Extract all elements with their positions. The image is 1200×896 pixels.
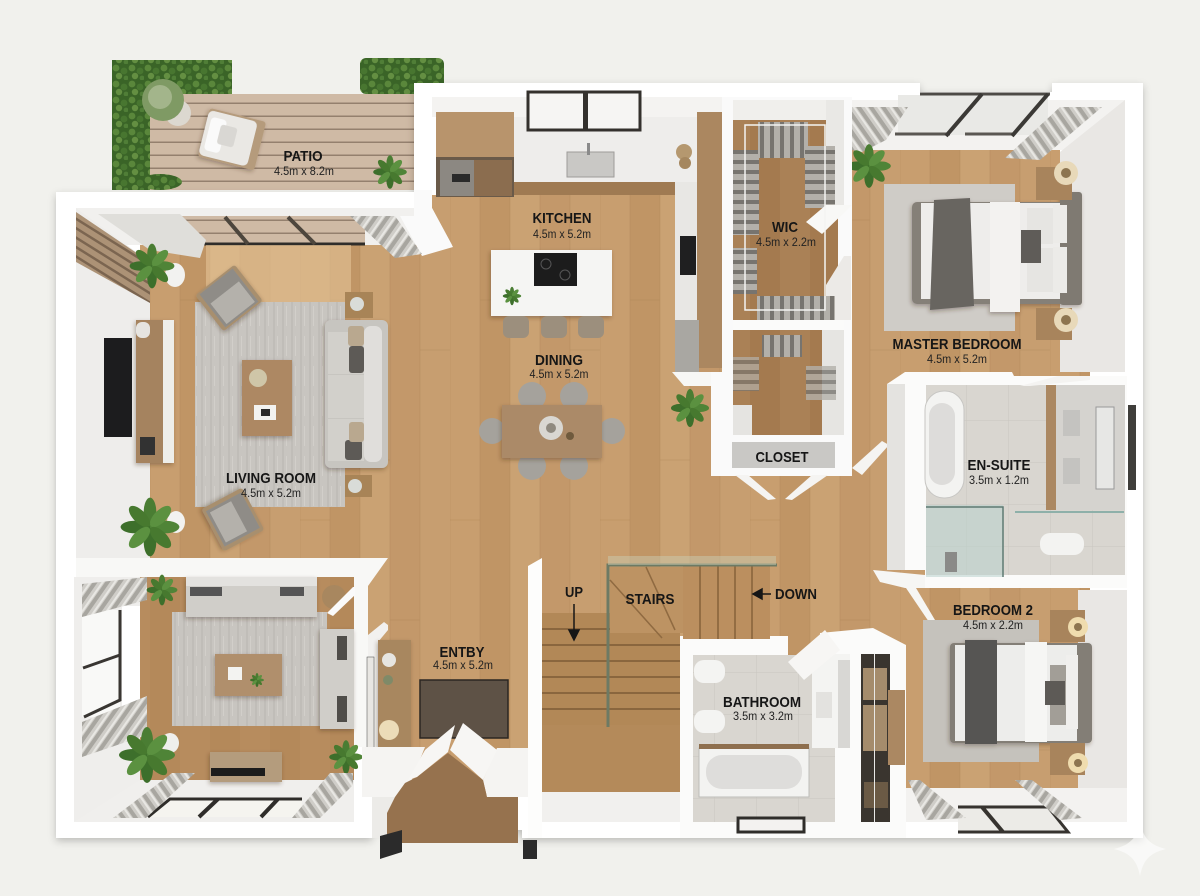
ensuite bottom ledge: [873, 570, 925, 588]
master rug: [884, 184, 1015, 331]
panel: master bedroom: [847, 94, 1125, 372]
arrow: down: [753, 589, 771, 599]
lounge curtain lower: [82, 696, 147, 757]
patio hedge: [112, 60, 232, 190]
bathroom floor: [693, 655, 835, 822]
label: stairs: STAIRS: [626, 591, 674, 608]
nightstand top: [1036, 161, 1078, 200]
ensuite door: [1020, 376, 1090, 386]
armchair top: [195, 264, 263, 332]
icon: sparkle watermark: [1114, 822, 1166, 876]
bathroom door: [788, 630, 840, 680]
bar stools: [503, 316, 604, 338]
kitchen counter: [514, 117, 698, 182]
label: entby: 4.5m x 5.2m: [433, 658, 493, 672]
panel: main wood floor: [140, 195, 1090, 795]
kitchen window: [528, 92, 640, 130]
bedroom2 curtain right: [1015, 780, 1082, 820]
winder steps: [610, 567, 683, 633]
label: bathroom: [723, 694, 801, 723]
armchair bottom: [201, 488, 264, 552]
lounge curtain bottom left: [113, 773, 195, 818]
label: en-suite: [968, 457, 1030, 487]
clothes right: [805, 146, 835, 208]
master window: [895, 94, 1050, 136]
label: bedroom 2: BEDROOM 2: [953, 602, 1033, 619]
porch post left: [380, 830, 402, 859]
entry wall left: [362, 747, 425, 797]
closet floor: [733, 330, 839, 435]
label: bathroom: BATHROOM: [723, 694, 801, 711]
patio lounge chair: [198, 108, 266, 171]
label: patio: 4.5m x 8.2m: [274, 164, 334, 178]
closet clothes left: [733, 357, 759, 391]
panel: kitchen: [432, 92, 728, 386]
island plant: [503, 287, 521, 305]
WIC stub wall: [826, 256, 851, 320]
slatted wall panel: [76, 212, 150, 303]
bedroom2 nightstand top: [1050, 610, 1088, 642]
lounge large plant: [119, 727, 179, 783]
WIC right face: [826, 100, 844, 225]
stair well base: [542, 792, 680, 822]
glass rail: [608, 565, 777, 727]
sofa: [325, 320, 388, 468]
dining table: [502, 405, 602, 458]
living window: [165, 216, 365, 245]
lounge left face: [74, 577, 140, 822]
panel: entry: [362, 640, 537, 859]
wardrobe wood panel: [888, 690, 905, 765]
label: master bedroom: [892, 336, 1022, 366]
WIC floor: [733, 120, 838, 320]
closet clothes top: [762, 335, 802, 357]
lounge window bottom: [148, 798, 302, 817]
living curtain left: [98, 214, 206, 258]
WIC rail: [745, 125, 825, 310]
arrow: up: [569, 604, 579, 640]
label: master bedroom: 4.5m x 5.2m: [927, 352, 987, 366]
living curtain right: [350, 216, 422, 258]
panel: dining set: [479, 382, 625, 480]
media console: [136, 320, 174, 463]
kitchen white top: [432, 97, 728, 117]
clothes left lower: [733, 248, 757, 294]
label: bedroom 2: [953, 602, 1033, 632]
bathroom block walls: [680, 628, 906, 838]
master bed: [912, 192, 1082, 312]
living rug: [195, 302, 345, 507]
panel: stairs: [528, 556, 777, 838]
kitchen upper cabinet: [436, 112, 514, 157]
side table bottom: [345, 475, 372, 497]
ensuite tile floor: [926, 385, 1125, 575]
plant: corridor: [671, 389, 709, 427]
bathroom window: [736, 817, 806, 833]
counter ornaments: [676, 144, 692, 169]
label: entby: ENTBY: [440, 644, 484, 661]
WIC divider: [733, 320, 844, 330]
light patch: [206, 245, 351, 315]
bedroom2 bed: [950, 640, 1092, 744]
wall corner kitchen side: [400, 190, 453, 256]
bedroom2 right face: [1078, 590, 1127, 822]
door mat: [420, 680, 508, 738]
lounge tv unit: [210, 752, 282, 782]
label: bedroom 2: 4.5m x 2.2m: [963, 618, 1023, 632]
label: patio: [274, 148, 334, 178]
bedroom2 door: [906, 588, 935, 622]
porch side: [372, 797, 395, 838]
closet band: [732, 442, 835, 468]
grey appliance: [675, 320, 699, 372]
label: patio: PATIO: [284, 148, 323, 165]
label: kitchen: KITCHEN: [532, 210, 592, 227]
dining chairs: [479, 382, 625, 480]
master right wall face: [1060, 100, 1125, 372]
bathroom vanity: [812, 654, 850, 748]
label: WIC: [756, 219, 816, 249]
label: bathroom: 3.5m x 3.2m: [733, 709, 793, 723]
plant: living large: [121, 498, 185, 556]
lounge corner wall: [354, 747, 372, 838]
bedroom2 nightstand bottom: [1050, 743, 1088, 775]
tub: [925, 391, 964, 498]
toilet lower: [694, 710, 725, 733]
label: closet: CLOSET: [756, 449, 808, 466]
shower glass: [926, 505, 1124, 577]
lounge curtain top: [82, 577, 147, 617]
label: en-suite: EN-SUITE: [968, 457, 1030, 474]
bathtub: [699, 744, 809, 797]
label: master bedroom: MASTER BEDROOM: [892, 336, 1022, 353]
panel: bedroom 2: [905, 590, 1127, 832]
label: dining: DINING: [535, 352, 583, 369]
bedroom2 rug: [923, 620, 1039, 762]
ensuite walls: [887, 372, 1127, 588]
lounge sofa right: [320, 629, 354, 729]
entry console: [378, 640, 411, 748]
lounge walls: [76, 558, 388, 747]
lounge door: [327, 587, 355, 616]
WIC door: [806, 205, 852, 234]
label: up: UP: [565, 584, 583, 601]
label: living room: LIVING ROOM: [226, 470, 316, 487]
closet shelf: [733, 405, 752, 435]
label: living room: 4.5m x 5.2m: [241, 486, 301, 500]
kitchen stub wall: [672, 372, 722, 386]
entry door right: [450, 723, 497, 780]
room labels: [226, 148, 1033, 723]
lounge rug: [172, 612, 327, 726]
label: en-suite: 3.5m x 1.2m: [969, 473, 1029, 487]
nightstand bottom: [1036, 308, 1078, 340]
bedroom2 window: [958, 805, 1068, 832]
upper flight: [683, 565, 770, 639]
panel: bathroom and wardrobe: [680, 628, 906, 838]
label: WIC: WIC: [772, 219, 798, 236]
label: kitchen: 4.5m x 5.2m: [533, 227, 591, 241]
label: living room: [226, 470, 316, 500]
landing: [542, 725, 680, 792]
winder lines: [610, 567, 675, 638]
plant: living corner: [130, 244, 185, 288]
lounge small plant: [329, 740, 363, 774]
clothes top: [758, 122, 808, 158]
bedroom2 bottom ledge: [905, 788, 1127, 822]
label: dining: 4.5m x 5.2m: [530, 367, 588, 381]
panel: WIC and closet: [711, 97, 889, 500]
lounge curtain bottom right: [292, 773, 353, 818]
closet clothes right: [806, 366, 836, 400]
patio hedge right: [360, 58, 444, 94]
TV: [104, 338, 132, 437]
patio potted shrub: [142, 79, 191, 126]
right counter: [675, 182, 698, 322]
lounge bottom ledge: [74, 780, 354, 822]
master upper floor: [851, 150, 1060, 196]
lower flight: [542, 613, 680, 725]
panel: en-suite: [873, 372, 1136, 622]
vanity: [1046, 385, 1125, 510]
glass pane: [608, 556, 776, 565]
wall oven: [680, 236, 696, 275]
lounge floor: [140, 577, 354, 780]
side table top: [345, 292, 373, 318]
clothes left: [733, 150, 759, 235]
label: entby: [433, 644, 493, 672]
fridge: [436, 157, 514, 197]
building walls: [56, 83, 1143, 838]
lounge wall stub: [368, 622, 388, 747]
panel: bottom-left lounge: [74, 558, 388, 838]
toilet upper: [694, 660, 725, 683]
panel: living room: [76, 190, 453, 558]
tall wood cabinet: [697, 112, 722, 368]
stair left wall: [528, 558, 542, 838]
closet doors: [735, 441, 889, 500]
porch floor: [387, 753, 518, 843]
porch post right: [523, 840, 537, 859]
master curtain left: [852, 107, 908, 152]
clothes bottom: [757, 296, 835, 320]
master window sill: [851, 100, 1125, 150]
wardrobe: [861, 654, 890, 822]
label: down: DOWN: [775, 586, 817, 603]
master plant: [847, 144, 891, 188]
kitchen counter front: [514, 182, 676, 195]
closet right face: [822, 330, 844, 435]
WIC back ledge: [733, 100, 838, 122]
closet block walls: [711, 97, 852, 476]
living top ledge: [76, 208, 452, 245]
toilet: [1040, 533, 1084, 555]
patio deck: [150, 94, 414, 190]
panel: patio: [112, 58, 444, 190]
island: [491, 250, 612, 316]
lounge coffee table: [215, 654, 282, 696]
wall art: [367, 657, 374, 749]
patio grass plant: [373, 155, 407, 189]
coffee table: [242, 360, 292, 436]
entry door left: [408, 725, 455, 780]
master curtain right: [1005, 107, 1102, 160]
sink: [567, 143, 614, 177]
entry wall right: [483, 748, 528, 797]
hedge corner shrub: [138, 174, 182, 190]
lounge window: [82, 606, 140, 717]
table centrepiece: [539, 416, 574, 440]
ensuite left grey face: [887, 384, 905, 570]
lounge sofa top: [186, 577, 317, 617]
living left wall face: [76, 208, 150, 558]
lounge plant top: [147, 575, 177, 605]
lounge round table: [322, 585, 346, 609]
label: WIC: 4.5m x 2.2m: [756, 235, 816, 249]
ensuite window: [1128, 405, 1136, 490]
bedroom2 curtain left: [908, 780, 966, 820]
label: dining: [530, 352, 588, 381]
label: kitchen: [532, 210, 592, 241]
